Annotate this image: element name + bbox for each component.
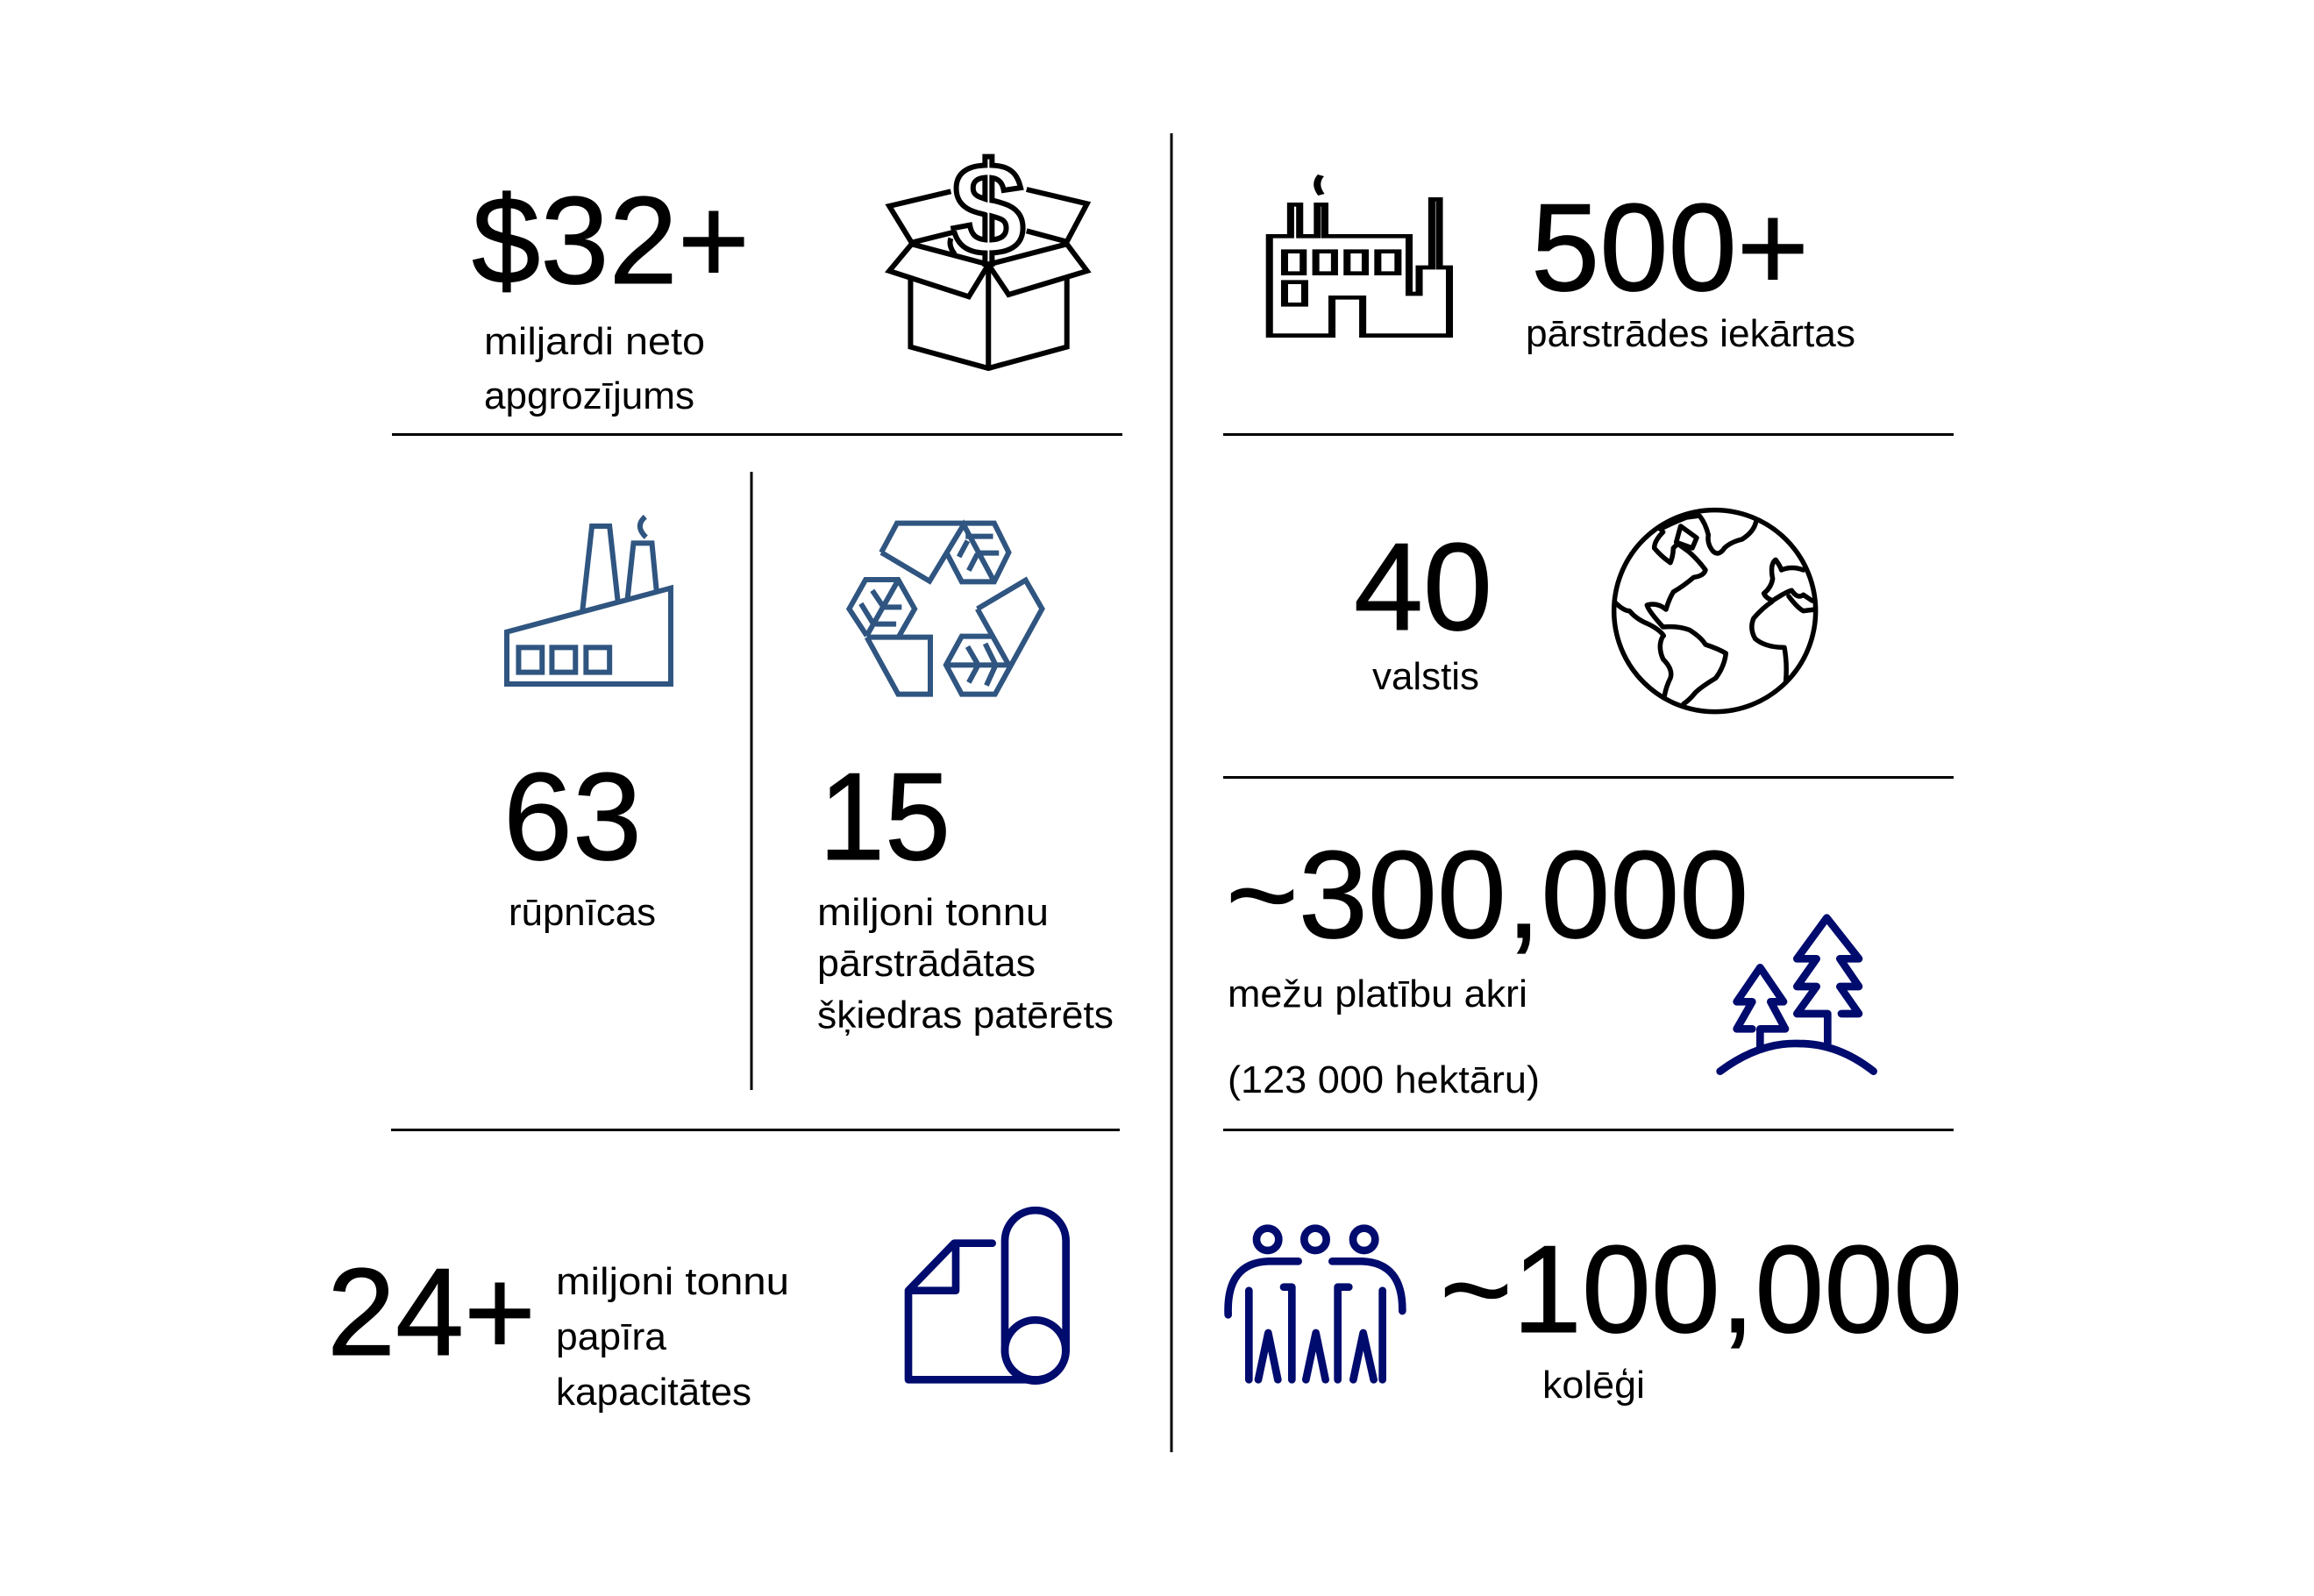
- icon: paper roll: [908, 1210, 1066, 1381]
- number: 24+: 24+: [327, 1243, 536, 1382]
- icon: blue factory: [507, 517, 671, 684]
- icon: three people: [1228, 1229, 1402, 1379]
- number: $32+: $32+: [472, 171, 750, 310]
- panel: mills: [503, 517, 671, 934]
- label: forest acres: mežu platību akri: [1228, 973, 1527, 1015]
- number: 500+: 500+: [1531, 178, 1809, 317]
- label: fibre line 1: miljoni tonnu: [817, 891, 1049, 934]
- icon: globe: [1614, 510, 1816, 712]
- panel: paper capacity: [327, 1210, 1066, 1414]
- icon: recycling with leaves: [849, 524, 1042, 695]
- icon: dollar in box: $: [951, 135, 1025, 282]
- number: ~100,000: ~100,000: [1440, 1220, 1962, 1359]
- panel: recycled fibre: [817, 524, 1114, 1037]
- label: capacity line 2: papīra: [556, 1315, 667, 1358]
- label: fibre line 2: pārstrādātas: [817, 942, 1036, 985]
- panel: colleagues: [1228, 1220, 1962, 1407]
- number: 15: 15: [819, 747, 951, 887]
- label: forest hectares: (123 000 hektāru): [1228, 1058, 1540, 1101]
- label: revenue: miljardi neto: [484, 320, 705, 363]
- label: capacity line 1: miljoni tonnu: [556, 1260, 789, 1303]
- panel: forest land: [1226, 825, 1874, 1101]
- number: 63: 63: [503, 747, 642, 887]
- panel: revenue: [472, 135, 1087, 417]
- icon: dollar in box: [889, 135, 1087, 368]
- label: revenue line 2: apgrozījums: [484, 374, 694, 417]
- panel: processing plants: [1270, 175, 1855, 355]
- icon: trees on a hill: [1720, 918, 1874, 1072]
- label: processing plants: pārstrādes iekārtas: [1526, 312, 1855, 355]
- label: fibre line 3: šķiedras patērēts: [817, 994, 1114, 1037]
- label: capacity line 3: kapacitātes: [556, 1371, 751, 1414]
- label: mills: rūpnīcas: [509, 891, 656, 934]
- number: 40: 40: [1354, 517, 1492, 657]
- label: colleagues: kolēģi: [1542, 1364, 1645, 1407]
- number: ~300,000: ~300,000: [1226, 825, 1748, 965]
- label: countries: valstis: [1372, 655, 1479, 698]
- panel: countries: [1354, 510, 1816, 712]
- icon: black factory: [1270, 175, 1449, 336]
